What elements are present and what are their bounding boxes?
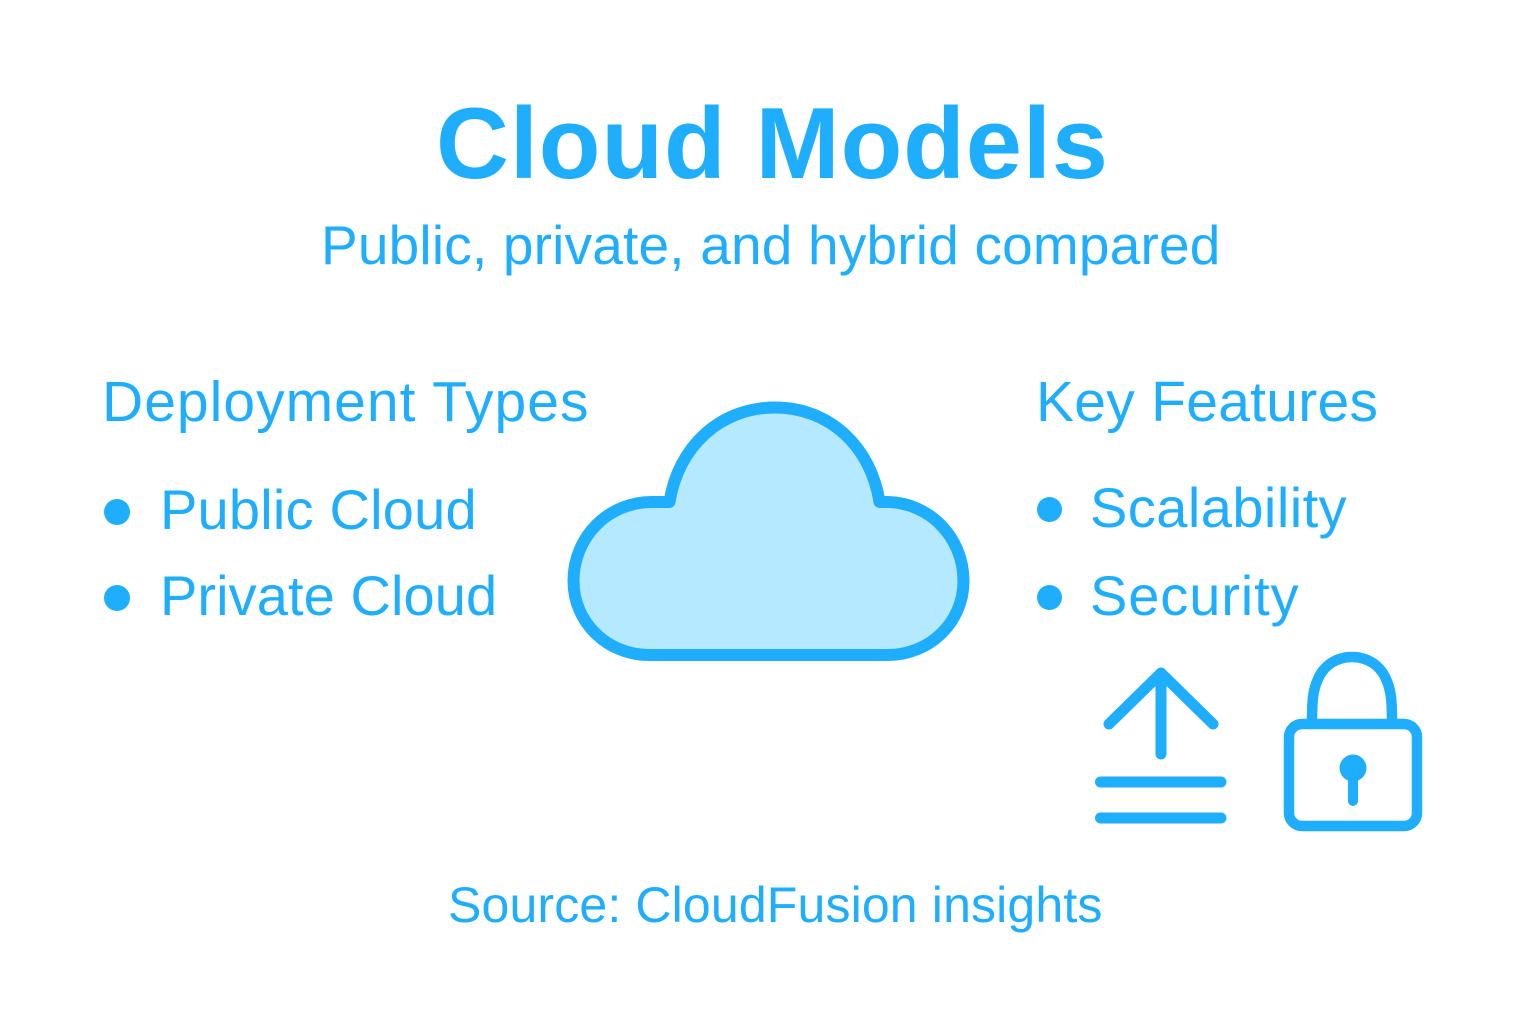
bullet: private cloud bbox=[104, 585, 130, 611]
list: deployment types bbox=[104, 478, 497, 627]
label: public cloud: Public Cloud bbox=[160, 478, 477, 541]
label: security: Security bbox=[1090, 564, 1300, 626]
label: scalability: Scalability bbox=[1090, 476, 1347, 539]
icon: upload arrow bbox=[1095, 668, 1226, 824]
bullet: security bbox=[1037, 585, 1062, 610]
source note: Source: CloudFusion insights bbox=[448, 877, 1103, 933]
bullet: scalability bbox=[1037, 497, 1062, 522]
list: key features bbox=[1037, 476, 1347, 626]
icon: padlock bbox=[1284, 652, 1422, 832]
label: private cloud: Private Cloud bbox=[160, 564, 497, 627]
title: Cloud Models bbox=[436, 88, 1109, 200]
bullet: public cloud bbox=[104, 499, 130, 525]
heading: key features: Key Features bbox=[1036, 370, 1378, 434]
subtitle: Public, private, and hybrid compared bbox=[321, 214, 1221, 276]
icon: cloud bbox=[568, 402, 970, 661]
heading: deployment types: Deployment Types bbox=[102, 370, 590, 434]
